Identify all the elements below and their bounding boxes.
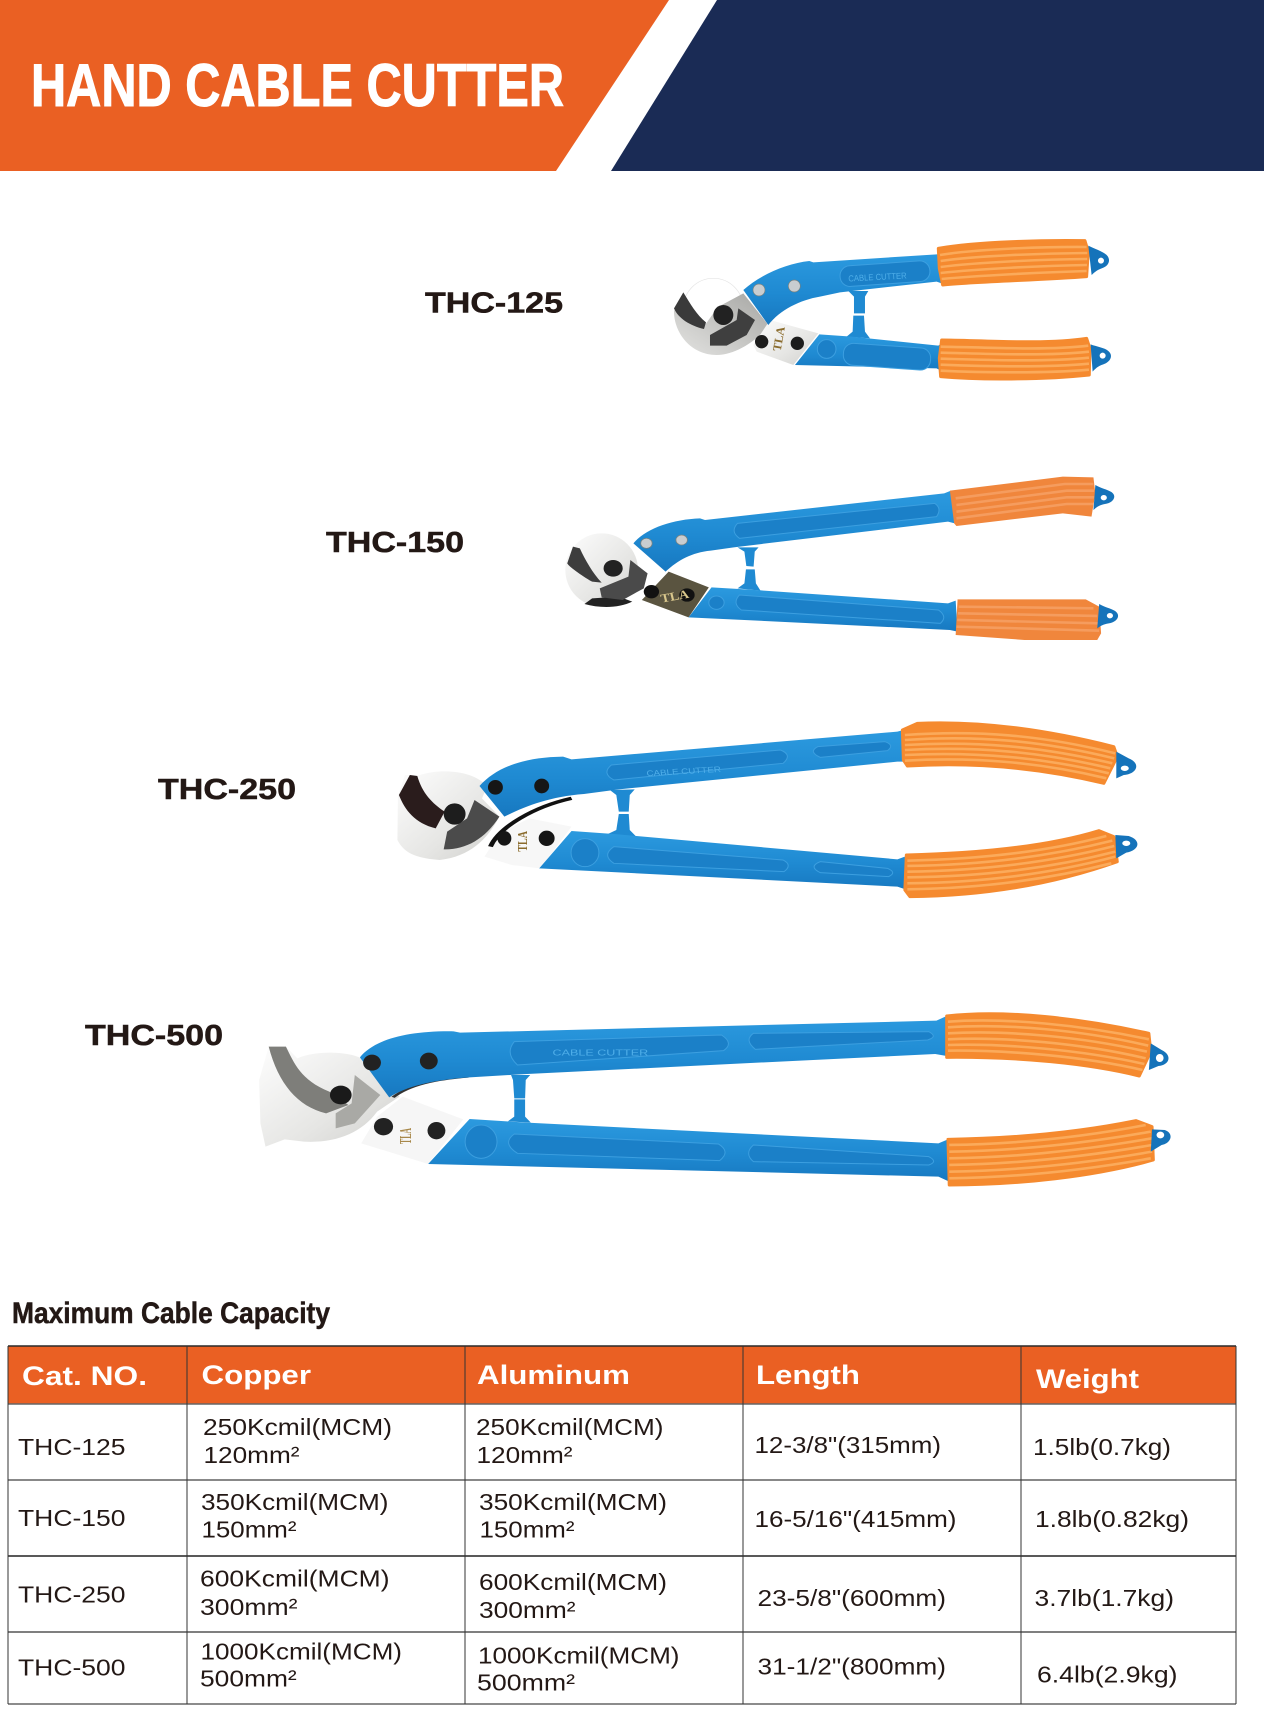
cutter illustration: THC-125	[674, 241, 1111, 379]
connector bar	[508, 1075, 531, 1123]
upper grip	[950, 477, 1095, 526]
upper handle	[360, 1016, 947, 1097]
capacity table	[8, 1346, 1236, 1704]
row: THC-125: 250Kcmil(MCM)	[203, 1414, 392, 1440]
connector bar	[847, 291, 870, 338]
row: THC-250: 300mm²	[479, 1597, 576, 1623]
lower eyelet	[1097, 604, 1118, 628]
row: THC-150	[18, 1489, 1189, 1543]
connector bar	[608, 789, 636, 837]
upper handle	[743, 253, 942, 325]
row: THC-250: THC-250	[18, 1582, 126, 1608]
handle recesses	[709, 503, 944, 623]
model label: THC-150: THC-150	[326, 527, 464, 559]
row: THC-125: 250Kcmil(MCM)	[476, 1414, 664, 1440]
upper handle	[480, 730, 905, 817]
model label: THC-250: THC-250	[158, 774, 296, 806]
row: THC-125: 120mm²	[476, 1442, 573, 1468]
cover bolts	[753, 280, 800, 296]
upper eyelet	[1093, 485, 1114, 510]
lower eyelet	[1151, 1129, 1171, 1152]
row: THC-150: 16-5/16"(415mm)	[754, 1506, 956, 1532]
navy panel	[611, 0, 1264, 171]
row: THC-125: 120mm²	[204, 1442, 300, 1468]
lower grip	[939, 338, 1090, 379]
cutting head	[259, 1047, 468, 1164]
handle lettering: CABLE CUTTER	[646, 766, 721, 779]
row: THC-500: 6.4lb(2.9kg)	[1037, 1662, 1178, 1688]
row: THC-500: THC-500	[18, 1654, 126, 1680]
row: THC-500: 1000Kcmil(MCM)	[478, 1642, 680, 1668]
row: THC-500: 500mm²	[200, 1666, 297, 1692]
table heading: Maximum Cable Capacity	[12, 1297, 330, 1330]
cutting head	[397, 771, 572, 868]
model label: THC-125: THC-125	[425, 288, 563, 320]
handle lettering: CABLE CUTTER	[553, 1047, 648, 1057]
header: Aluminum: Aluminum	[477, 1360, 630, 1390]
header: Cat. NO.: Cat. NO.	[22, 1361, 147, 1391]
row: THC-150: 350Kcmil(MCM)	[479, 1489, 667, 1515]
row: THC-250: 600Kcmil(MCM)	[200, 1566, 390, 1592]
lower handle	[539, 831, 907, 890]
row: THC-250: 23-5/8"(600mm)	[758, 1585, 946, 1611]
header: Length: Length	[756, 1360, 860, 1390]
row: THC-125: THC-125	[18, 1434, 126, 1460]
model label: THC-500: THC-500	[85, 1020, 223, 1052]
cover bolts	[488, 779, 549, 795]
row: THC-500: 1000Kcmil(MCM)	[200, 1638, 402, 1664]
upper handle	[633, 491, 955, 572]
cutting head	[565, 533, 709, 617]
cutting head: TLA	[514, 831, 530, 852]
row: THC-250	[18, 1566, 1174, 1623]
row: THC-500: 31-1/2"(800mm)	[758, 1654, 946, 1680]
handle recesses	[465, 1032, 934, 1165]
lower grip	[905, 831, 1117, 897]
upper eyelet	[1116, 752, 1136, 778]
lower grip	[956, 599, 1101, 640]
upper eyelet	[1088, 246, 1109, 275]
row: THC-150: 350Kcmil(MCM)	[201, 1489, 388, 1515]
cover bolts	[641, 535, 687, 548]
header: Copper: Copper	[202, 1360, 312, 1390]
row: THC-250: 3.7lb(1.7kg)	[1034, 1585, 1174, 1611]
orange title panel	[0, 0, 669, 171]
row: THC-125: 1.5lb(0.7kg)	[1033, 1434, 1171, 1460]
lower eyelet	[1091, 344, 1111, 372]
upper grip	[938, 241, 1088, 285]
row: THC-150: 150mm²	[480, 1517, 575, 1543]
row: THC-500	[18, 1638, 1178, 1696]
title: HAND CABLE CUTTER	[31, 52, 564, 119]
table grid lines	[8, 1346, 1236, 1704]
connector bar	[738, 547, 760, 591]
lower handle	[795, 334, 942, 371]
handle lettering: CABLE CUTTER	[848, 270, 907, 283]
lower handle	[428, 1119, 949, 1182]
cutting head: TLA	[770, 325, 788, 352]
cover bolts	[363, 1053, 438, 1071]
row: THC-250: 600Kcmil(MCM)	[479, 1569, 667, 1595]
cutting head: TLA	[659, 586, 691, 605]
cutter illustration: THC-500	[259, 1014, 1171, 1185]
lower handle	[689, 587, 958, 632]
cutting head	[674, 278, 818, 365]
cutting head: TLA	[396, 1128, 415, 1144]
cutter illustration: THC-150	[565, 477, 1118, 640]
lower eyelet	[1115, 835, 1137, 858]
cutter illustration: THC-250	[397, 723, 1137, 897]
row: THC-150: 150mm²	[202, 1517, 297, 1543]
header banner	[0, 0, 1264, 171]
row: THC-150: THC-150	[18, 1505, 126, 1531]
table header row	[8, 1346, 1236, 1404]
row: THC-125: 12-3/8"(315mm)	[754, 1432, 941, 1458]
header: Weight: Weight	[1036, 1364, 1139, 1394]
upper grip	[947, 1014, 1151, 1076]
row: THC-125	[18, 1414, 1171, 1468]
row: THC-500: 500mm²	[477, 1670, 575, 1696]
row: THC-150: 1.8lb(0.82kg)	[1035, 1506, 1189, 1532]
upper grip	[902, 723, 1117, 783]
upper eyelet	[1149, 1043, 1169, 1070]
handle recesses	[817, 260, 931, 371]
row: THC-250: 300mm²	[200, 1594, 298, 1620]
handle recesses	[571, 742, 893, 877]
lower grip	[948, 1121, 1153, 1185]
